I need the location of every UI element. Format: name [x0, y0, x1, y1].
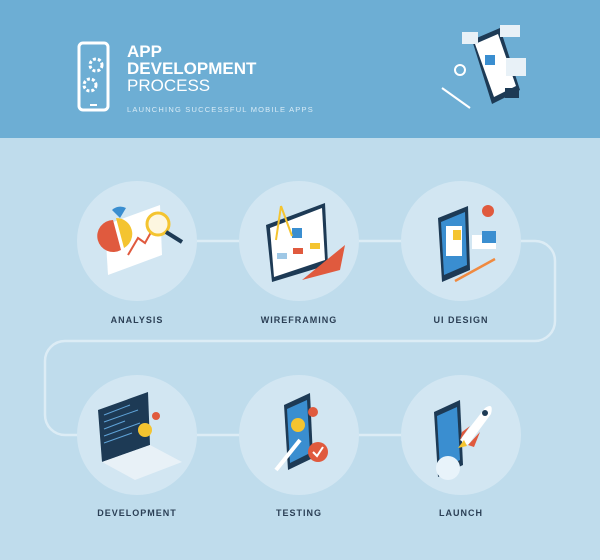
step labels	[97, 315, 489, 518]
header band	[0, 0, 600, 138]
header illustration: phone with UI panels	[442, 25, 526, 108]
icon: phone with gears	[79, 43, 108, 110]
step labels: DEVELOPMENT	[97, 508, 177, 518]
icon: development laptop	[98, 392, 182, 480]
icon: ui design	[438, 205, 496, 282]
title: PROCESS	[127, 76, 210, 95]
title: DEVELOPMENT	[127, 59, 257, 78]
step labels: TESTING	[276, 508, 322, 518]
step labels: ANALYSIS	[111, 315, 163, 325]
flow path connector	[45, 241, 555, 435]
icon: launch	[434, 400, 492, 480]
title: APP	[127, 42, 162, 61]
icon: wireframing	[266, 203, 345, 282]
step labels: UI DESIGN	[433, 315, 489, 325]
icon: analysis	[97, 205, 182, 275]
title	[127, 42, 314, 114]
step labels: LAUNCH	[439, 508, 483, 518]
title: LAUNCHING SUCCESSFUL MOBILE APPS	[127, 105, 314, 114]
icon: testing	[276, 393, 328, 470]
step circles	[77, 181, 521, 495]
step labels: WIREFRAMING	[261, 315, 337, 325]
